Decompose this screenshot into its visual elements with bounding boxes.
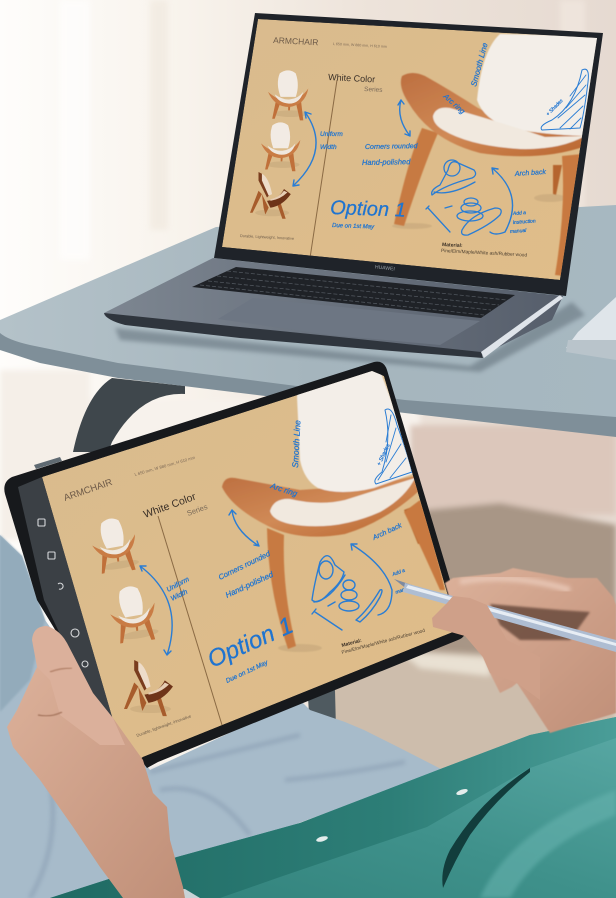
big chair [392, 34, 600, 276]
jeans body [0, 535, 443, 898]
screen background [42, 371, 458, 768]
handwritten notes: Add a [391, 568, 406, 578]
heading: White Color [328, 72, 375, 84]
handwritten notes: instruction [513, 218, 536, 226]
handwritten notes: Smooth Line [290, 420, 303, 468]
handwritten notes: Uniform [320, 131, 343, 138]
knuckle highlight [460, 578, 570, 590]
shirt buttons [316, 788, 468, 843]
table front edge [0, 330, 616, 437]
handwritten notes: Hand-polished [224, 570, 275, 600]
shirt [50, 717, 616, 898]
laptop [104, 13, 603, 358]
shadow between fingers [490, 604, 590, 640]
big chair [222, 365, 445, 652]
stylus tip [394, 579, 412, 590]
material text: Material: [341, 638, 363, 649]
handwritten notes: manual [510, 228, 527, 235]
hatch note [541, 69, 588, 130]
handwritten notes: + Shades [545, 98, 565, 117]
laptop brand: HUAWEI [375, 264, 395, 272]
laptop shadow on table [115, 302, 585, 372]
background: curtain folds [60, 0, 585, 260]
handwritten notes: Add a [512, 210, 526, 217]
table lower leg [308, 690, 336, 730]
handwritten notes: Option 1 [203, 612, 297, 673]
laptop base [104, 258, 563, 356]
palm [7, 667, 185, 898]
shirt cuff [123, 889, 200, 898]
screen background [222, 19, 597, 280]
thumb [32, 626, 125, 745]
caption: Durable, Lightweight, Innovative [240, 234, 294, 241]
caption: Durable, lightweight, innovative [136, 713, 192, 738]
dimensions: L 650 mm, W 880 mm, H 610 mm [333, 42, 387, 49]
handwritten notes: Uniform [166, 576, 191, 594]
handwritten notes: Arch back [371, 522, 404, 542]
laptop lid [214, 13, 603, 296]
shirt pocket fold [442, 768, 530, 888]
handwritten notes: + Shades [376, 443, 392, 467]
hand back [445, 568, 616, 733]
subheading: Series [364, 86, 383, 94]
thumb crease [50, 668, 72, 672]
handwritten notes [320, 41, 565, 235]
handwritten notes: Due on 1st May [332, 223, 375, 231]
handwritten notes: Corners rounded [217, 549, 272, 582]
jeans upper thigh shade [0, 535, 45, 712]
tablet [4, 362, 465, 768]
handwritten notes: Hand-polished [362, 157, 411, 167]
stylus body [403, 583, 616, 652]
material text: Material: [442, 242, 463, 249]
assembly sketch [426, 160, 501, 235]
tablet side bar [18, 477, 127, 768]
toolbar icons [38, 519, 88, 667]
handwritten notes: Due on 1st May [225, 659, 270, 685]
background: room below the table [0, 370, 616, 790]
handwritten notes [166, 420, 413, 685]
material text: Pine/Elm/Maple/White ash/Rubber wood [341, 628, 426, 656]
handwritten notes: Corners rounded [365, 143, 419, 151]
small chairs [268, 70, 308, 120]
handwritten notes: Arch back [514, 169, 547, 178]
palm crease [38, 712, 62, 716]
material text [441, 242, 527, 256]
laptop keyboard keys [200, 271, 507, 315]
table leg [73, 378, 185, 452]
laptop keyboard [192, 267, 515, 318]
shirt placket [50, 717, 616, 898]
handwritten notes: Width [170, 589, 189, 603]
handwritten notes: Arc ring [441, 91, 468, 116]
tablet side button [34, 457, 62, 469]
laptop front edge [104, 313, 483, 358]
left hand [7, 626, 185, 898]
arrows [293, 100, 513, 234]
handwritten notes: Width [320, 144, 337, 151]
handwritten notes: Smooth Line [469, 41, 490, 88]
handwritten notes: Arc ring [268, 481, 299, 499]
keyboard on table [566, 297, 616, 360]
lower finger [432, 596, 540, 700]
jeans folds [30, 735, 405, 898]
tablet screen [42, 365, 458, 768]
jeans [0, 535, 443, 898]
shirt body [50, 717, 616, 898]
hatch note [375, 409, 412, 484]
laptop side edge [481, 295, 563, 358]
laptop screen [222, 19, 600, 280]
divider [310, 80, 337, 258]
subheading: Series [186, 502, 209, 518]
shirt lighter fold [480, 790, 616, 898]
tablet body [4, 362, 465, 768]
divider [158, 516, 222, 725]
laptop touchpad [218, 298, 480, 345]
arrows [140, 510, 392, 655]
assembly sketch [312, 556, 382, 630]
small chairs [92, 518, 139, 574]
logo: ARMCHAIR [273, 35, 319, 47]
table top surface [0, 205, 616, 417]
heading: White Color [142, 491, 198, 521]
dimensions: L 650 mm, W 880 mm, H 610 mm [134, 455, 196, 477]
material text: Pine/Elm/Maple/White ash/Rubber wood [441, 248, 528, 259]
handwritten notes: manual [395, 584, 413, 596]
table [0, 205, 616, 730]
handwritten notes: Option 1 [330, 197, 406, 222]
right hand and stylus [394, 568, 616, 733]
logo: ARMCHAIR [62, 477, 114, 504]
stylus highlight [406, 585, 616, 646]
